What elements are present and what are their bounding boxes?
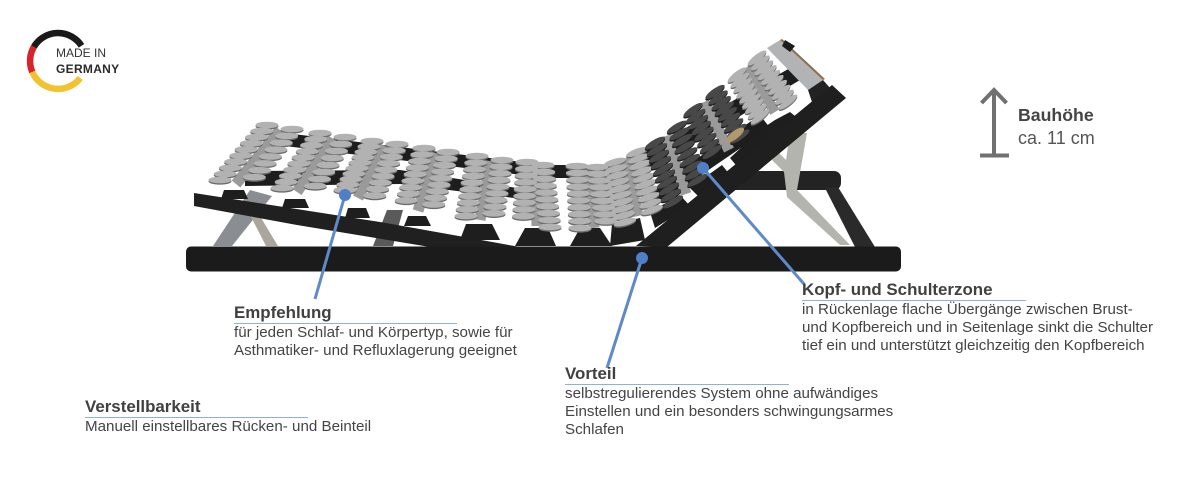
callout: Vorteil (565, 364, 893, 438)
longitudinal black rails under discs (245, 68, 800, 210)
callout: Empfehlung: Asthmatiker- und Refluxlagerung geeignet (234, 342, 517, 359)
callout: Kopf- und Schulterzone: Kopf- und Schulterzone (802, 280, 992, 299)
callout: Kopf- und Schulterzone: und Kopfbereich und in Seitenlage sinkt die Schulter (802, 319, 1153, 336)
tilting side frame left (194, 193, 520, 247)
callout: Verstellbarkeit: Verstellbarkeit (85, 397, 200, 416)
callout: Vorteil: Einstellen und ein besonders schwingungsarmes (565, 403, 893, 420)
callout: Vorteil: selbstregulierendes System ohne aufwändiges (565, 385, 878, 402)
callout: Vorteil: Vorteil (565, 364, 616, 383)
height label: Bauhöhe (1018, 105, 1094, 125)
callout: Vorteil: Schlafen (565, 421, 624, 438)
callout: Empfehlung (234, 303, 517, 359)
callout: Verstellbarkeit (85, 397, 371, 435)
base frame (186, 246, 901, 272)
logo text: MADE IN (56, 46, 106, 60)
callout: Empfehlung: Empfehlung (234, 303, 332, 322)
brown disc accent (724, 125, 746, 145)
height label: ca. 11 cm (1018, 128, 1095, 148)
raised back frame (636, 85, 846, 247)
callout: Kopf- und Schulterzone: tief ein und unterstützt gleichzeitig den Kopfbereich (802, 337, 1145, 354)
logo ring: German colours (30, 33, 82, 89)
height label (1018, 105, 1095, 148)
height arrow icon (980, 90, 1009, 156)
rear frame rail (725, 171, 841, 190)
logo text: GERMANY (56, 62, 119, 76)
sprung discs: grey (220, 58, 790, 229)
front silver struts (213, 190, 403, 246)
rear support leg (825, 187, 875, 247)
callout: Empfehlung: für jeden Schlaf- und Körpertyp, sowie für (234, 324, 513, 341)
callout: Kopf- und Schulterzone (802, 280, 1153, 354)
carrier brackets (221, 112, 800, 246)
callout: Kopf- und Schulterzone: in Rückenlage flache Übergänge zwischen Brust- (802, 301, 1133, 318)
rear silver strut (772, 133, 850, 245)
head end silver crossbar (767, 39, 830, 102)
disc module spines (236, 67, 775, 228)
sprung discs: dark shoulder zone (643, 92, 748, 203)
callout: Verstellbarkeit: Manuell einstellbares Rücken- und Beinteil (85, 418, 371, 435)
logo text (56, 46, 119, 76)
callout lines and dots (315, 162, 804, 368)
